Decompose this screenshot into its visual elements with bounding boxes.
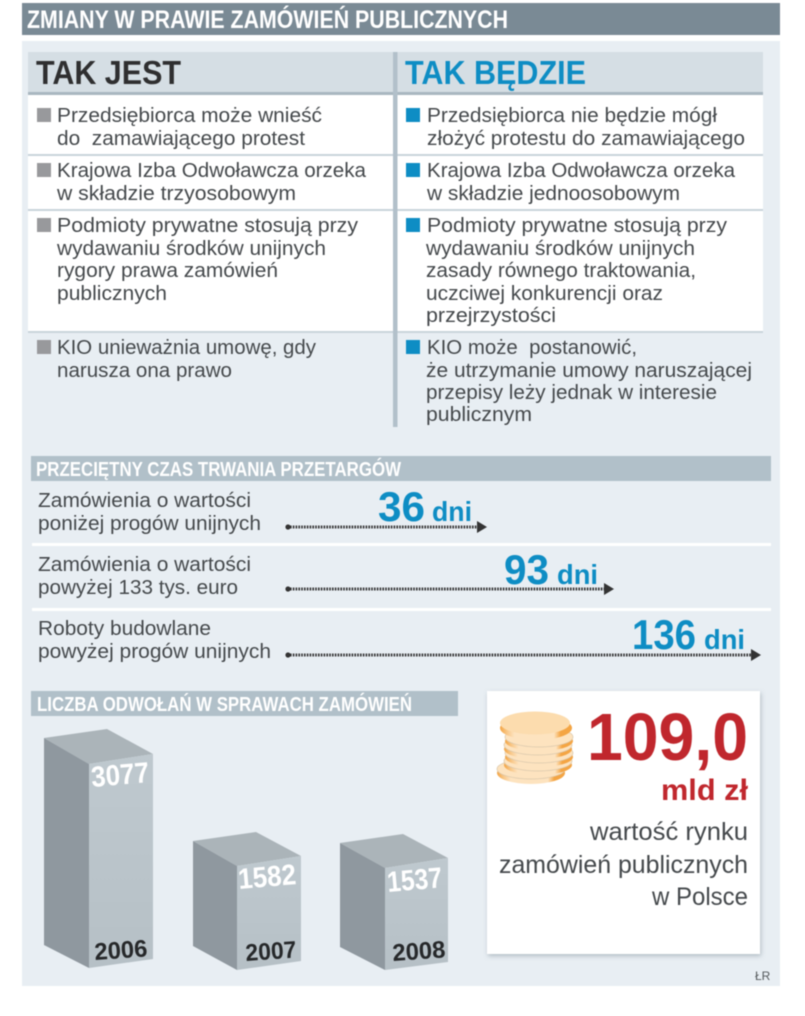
row: 136 dni [38, 611, 761, 663]
row: 136 dni: dni [704, 624, 745, 655]
title bar [22, 3, 780, 35]
timeline chart [32, 483, 771, 663]
value: 109,0 mld zł: 109,0 [587, 700, 748, 775]
bar: 2007 [193, 832, 301, 970]
bar: 2006 [44, 729, 153, 968]
caption: w Polsce [651, 883, 748, 911]
value: 109,0 mld zł [587, 700, 749, 807]
row: 136 dni: powyżej progów unijnych [38, 641, 271, 663]
column: tak jest items: rygory prawa zamówień [57, 260, 278, 282]
column: tak będzie items: Krajowa Izba Odwoławcza orzeka [427, 160, 736, 182]
column: tak będzie items: złożyć protestu do zamawiającego [427, 128, 745, 150]
caption: zamówień publicznych [499, 851, 748, 879]
author credit: ŁR [755, 969, 771, 983]
bar: 2007: 2007 [245, 936, 297, 967]
caption: wartość rynku [589, 818, 748, 846]
callout: market value [487, 691, 760, 954]
column: tak będzie items [406, 105, 752, 426]
column: tak jest items: w składzie trzyosobowym [56, 183, 296, 205]
comparison table [28, 52, 763, 427]
row: 93 dni: dni [557, 559, 598, 590]
row: 136 dni: Roboty budowlane [38, 618, 211, 640]
column: tak będzie items: w składzie jednoosobowym [426, 183, 680, 205]
column: tak jest items: Przedsiębiorca może wnieść [57, 105, 322, 127]
row: 36 dni: poniżej progów unijnych [38, 513, 261, 535]
column: tak będzie items: Podmioty prywatne stosują przy [427, 215, 727, 237]
bar: 2007: 1582 [237, 859, 297, 896]
column: tak jest items: Krajowa Izba Odwoławcza orzeka [57, 160, 367, 182]
heading: tak jest: TAK JEST [36, 54, 181, 91]
row: 93 dni [38, 546, 614, 599]
column: tak będzie items: przepisy leży jednak w interesie [426, 382, 717, 404]
row: 36 dni: 36 [378, 483, 425, 530]
column: tak jest items [37, 105, 367, 382]
column: tak będzie items: Przedsiębiorca nie będzie mógł [427, 105, 718, 127]
section heading: liczba odwołań: LICZBA ODWOŁAŃ W SPRAWACH ZAMÓWIEŃ [37, 692, 412, 716]
row: 136 dni: 136 [632, 611, 696, 658]
column: tak będzie items: że utrzymanie umowy naruszającej [426, 360, 752, 382]
column: tak będzie items: KIO może postanowić, [427, 337, 637, 359]
column: tak jest items: publicznych [57, 283, 167, 305]
bar: 2008: 2008 [392, 936, 446, 967]
section heading: czas trwania [31, 456, 771, 481]
3d bar chart [44, 729, 448, 970]
title bar: ZMIANY W PRAWIE ZAMÓWIEŃ PUBLICZNYCH [27, 4, 508, 34]
heading: tak będzie: TAK BĘDZIE [405, 54, 586, 91]
row: 36 dni: dni [432, 496, 472, 527]
caption [499, 818, 748, 911]
row: 36 dni [38, 483, 487, 535]
column: tak będzie items: zasady równego traktowania, [426, 260, 696, 282]
row: 93 dni: Zamówienia o wartości [38, 554, 251, 576]
column: tak jest items: wydawaniu środków unijnych [56, 238, 326, 260]
column: tak jest items: narusza ona prawo [57, 360, 232, 382]
bar: 2008 [340, 834, 448, 970]
section heading: czas trwania: PRZECIĘTNY CZAS TRWANIA PRZETARGÓW [36, 457, 401, 481]
value: 109,0 mld zł: mld zł [661, 774, 749, 807]
column: tak jest items: do zamawiającego protest [57, 128, 305, 150]
column: tak będzie items: uczciwej konkurencji oraz [426, 283, 663, 305]
row: 93 dni: 93 [504, 546, 549, 593]
column: tak jest items: KIO unieważnia umowę, gdy [57, 337, 316, 359]
row: 36 dni: Zamówienia o wartości [38, 490, 251, 512]
column: tak będzie items: przejrzystości [426, 305, 556, 327]
column: tak jest items: Podmioty prywatne stosują przy [57, 215, 358, 237]
column: tak będzie items: publicznym [426, 404, 532, 426]
column: tak będzie items: wydawaniu środków unijnych [425, 238, 695, 260]
row: 93 dni: powyżej 133 tys. euro [38, 577, 238, 599]
bar: 2006: 2006 [94, 935, 148, 966]
bar: 2008: 1537 [386, 862, 443, 899]
icon: coin stack [497, 712, 573, 784]
bar: 2006: 3077 [90, 757, 150, 794]
